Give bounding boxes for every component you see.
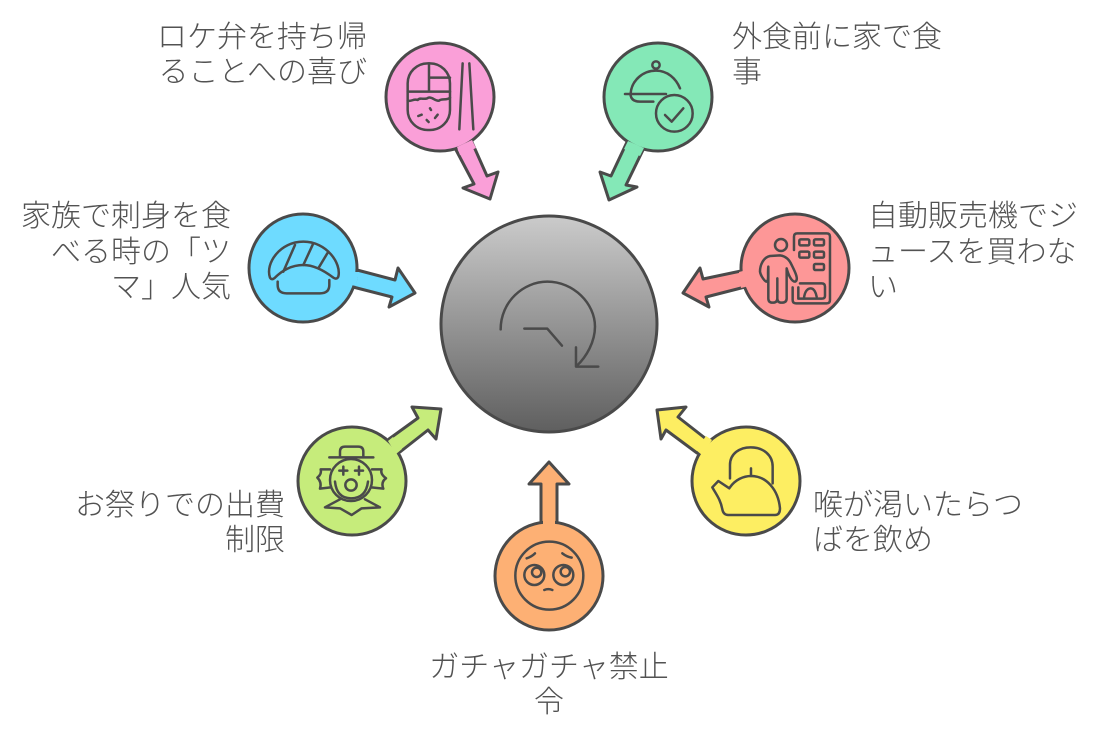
icon: cloche with check — [625, 61, 693, 132]
icon: bento box and chopsticks — [408, 63, 473, 130]
icon: pleading face — [515, 542, 583, 610]
label: no vending machine juice: い — [868, 271, 898, 304]
label: drink saliva when thirsty: ばを飲め — [813, 524, 933, 557]
icon: clockwise arrow and clock hands — [501, 282, 598, 367]
label: festival spending limit: お祭りでの出費 — [75, 489, 285, 522]
label: eat before dining out: 事 — [732, 56, 762, 89]
label: festival spending limit: 制限 — [225, 524, 285, 557]
central circle with clock icon — [441, 216, 657, 432]
node: dinner cloche (green) — [600, 43, 712, 200]
node: sushi (blue) — [249, 214, 415, 322]
label: bento: ロケ弁を持ち帰 — [157, 21, 367, 54]
node: kettle (yellow) — [657, 407, 800, 535]
node: vending machine (red) — [683, 214, 849, 322]
node: clown (lime) — [298, 407, 441, 535]
label: drink saliva when thirsty: 喉が渇いたらつ — [813, 489, 1023, 522]
label: eat before dining out: 外食前に家で食 — [732, 21, 942, 54]
label: gacha ban: ガチャガチャ禁止 — [429, 651, 669, 684]
label: no vending machine juice: ュースを買わな — [868, 236, 1076, 269]
label: sashimi garnish: マ」人気 — [111, 271, 231, 304]
node: pleading face (orange) — [495, 462, 603, 630]
icon: sushi — [269, 242, 339, 293]
label: sashimi garnish: 家族で刺身を食 — [21, 200, 231, 233]
node: bento (pink) — [386, 43, 498, 199]
label: no vending machine juice: 自動販売機でジ — [868, 200, 1078, 233]
icon: clown face — [317, 447, 386, 515]
label: gacha ban: 令 — [534, 686, 564, 719]
label: bento: ることへの喜び — [158, 56, 367, 89]
icon: kettle — [712, 447, 780, 515]
icon: person at vending machine — [760, 233, 830, 303]
label: sashimi garnish: べる時の「ツ — [51, 236, 231, 269]
